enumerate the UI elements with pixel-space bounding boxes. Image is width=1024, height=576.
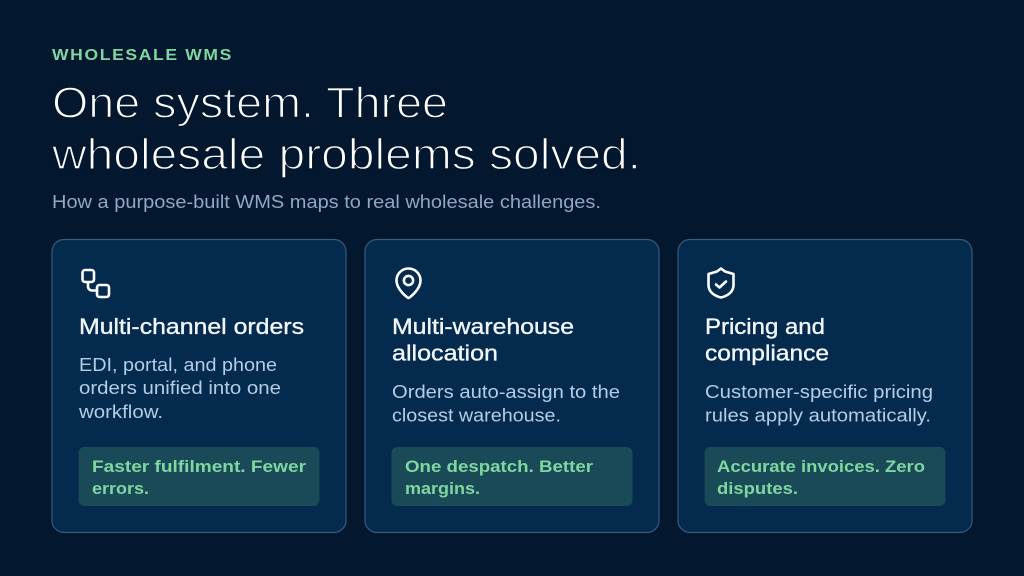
callout <box>78 447 320 506</box>
body text: EDI, portal, and phone <box>79 355 277 375</box>
subtitle: How a purpose-built WMS maps to real wholesale challenges. <box>52 192 601 212</box>
heading: multi-warehouse allocation: Multi-warehouse <box>392 314 574 339</box>
panel: multi-warehouse allocation <box>365 240 659 532</box>
body text <box>705 382 933 426</box>
callout <box>704 447 946 506</box>
title: One system. Three <box>52 78 448 128</box>
callout <box>392 447 632 506</box>
icon: location pin <box>396 268 420 298</box>
body text: Orders auto-assign to the <box>392 382 620 402</box>
body text <box>392 382 620 426</box>
heading: pricing and compliance: Pricing and <box>705 314 825 339</box>
heading: multi-warehouse allocation <box>392 314 574 366</box>
eyebrow label: WHOLESALE WMS <box>52 47 233 64</box>
body text: orders unified into one <box>79 378 281 398</box>
callout: disputes. <box>717 479 798 498</box>
callout: errors. <box>92 479 149 498</box>
icon: shield with check <box>708 268 734 298</box>
heading: multi-channel orders: Multi-channel orders <box>79 314 304 339</box>
callout: Accurate invoices. Zero <box>717 457 925 476</box>
callout: Faster fulfilment. Fewer <box>92 457 306 476</box>
title: wholesale problems solved. <box>51 130 641 179</box>
heading: pricing and compliance <box>705 314 829 366</box>
body text: Customer-specific pricing <box>705 382 933 402</box>
panel: pricing and compliance <box>678 240 972 532</box>
title <box>51 78 641 179</box>
body text: workflow. <box>78 402 163 422</box>
callout: margins. <box>405 479 480 498</box>
body text <box>78 355 281 422</box>
icon: linked squares <box>82 270 109 297</box>
body text: rules apply automatically. <box>705 406 931 426</box>
body text: closest warehouse. <box>392 406 561 426</box>
heading: multi-warehouse allocation: allocation <box>392 340 498 366</box>
heading: pricing and compliance: compliance <box>705 340 829 366</box>
callout: One despatch. Better <box>405 457 593 476</box>
panel: multi-channel orders <box>52 240 346 532</box>
